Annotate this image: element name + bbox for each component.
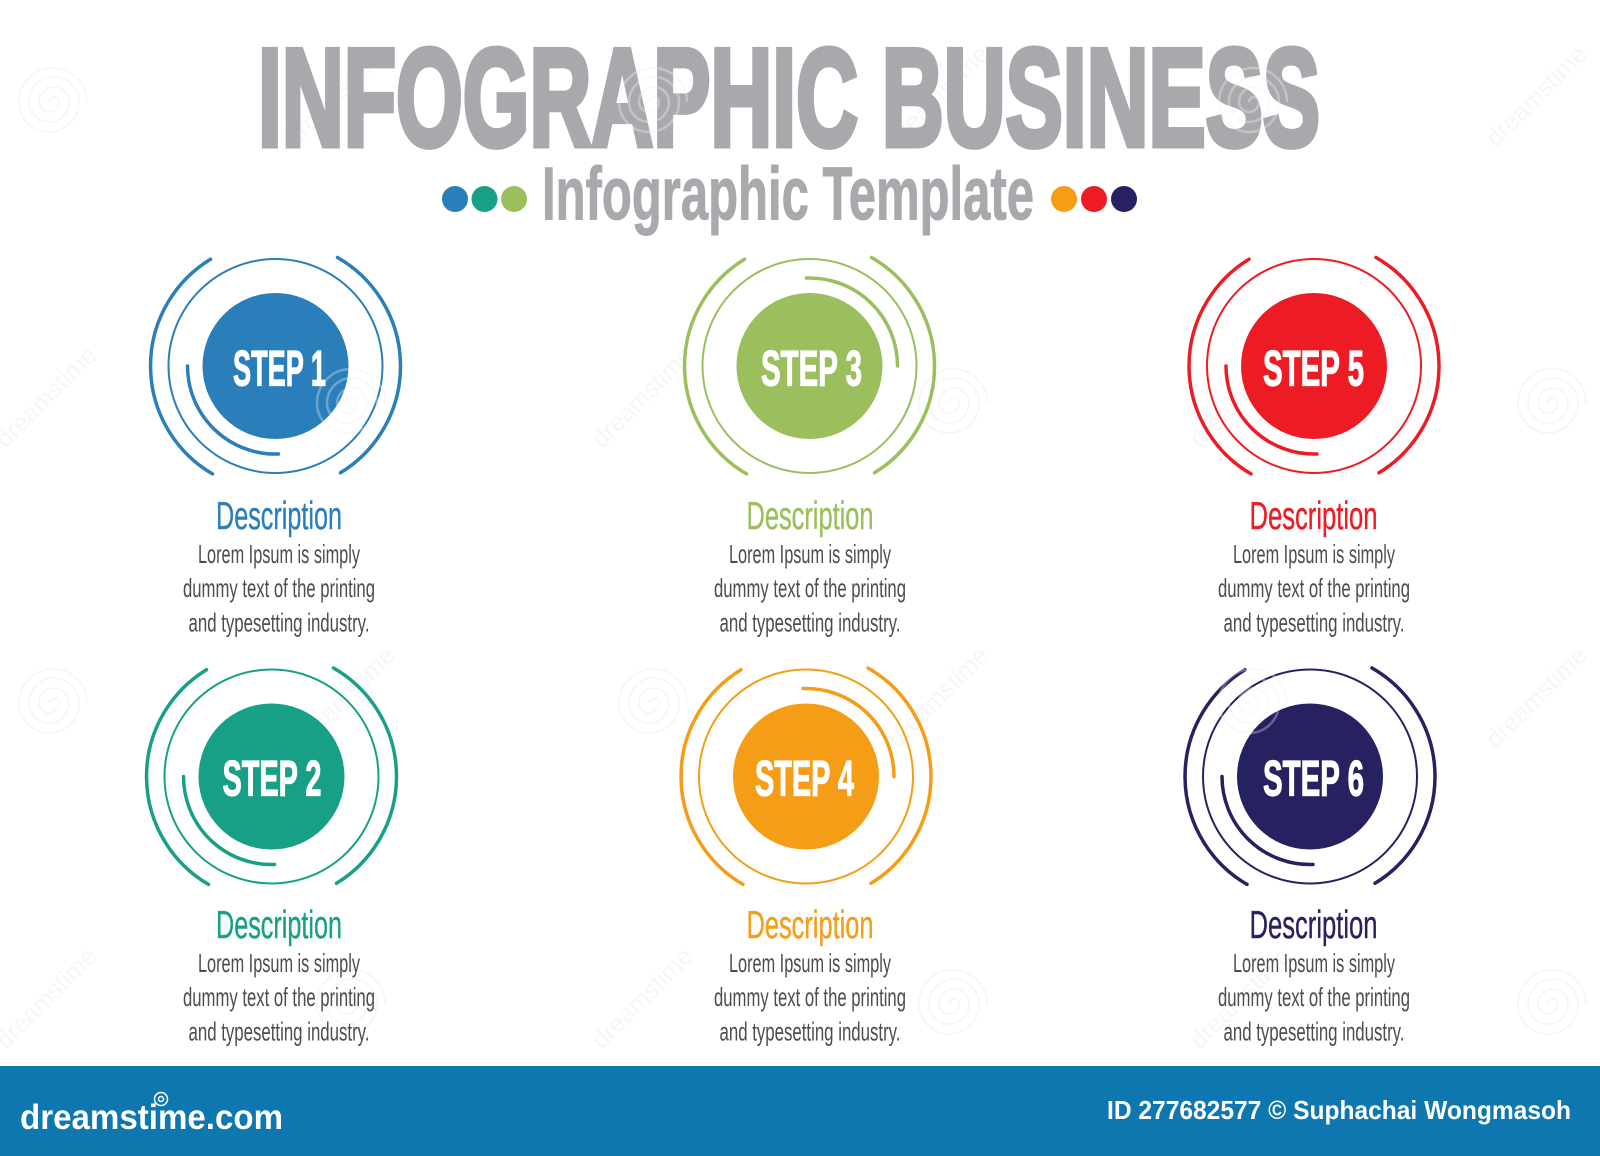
step 2 description: and typesetting industry. (188, 1016, 370, 1046)
step 2 description: Lorem Ipsum is simply (198, 948, 360, 978)
step 1 ring badge (151, 258, 400, 474)
panel: step 5 (1189, 258, 1439, 638)
step 5 description: dummy text of the printing (1218, 573, 1410, 603)
icon: left colour dots (442, 186, 527, 212)
text: dreamstime (1184, 341, 1296, 453)
panel: step 4 (681, 668, 931, 1046)
step 5 description (1218, 539, 1410, 638)
step 6 description: dummy text of the printing (1218, 982, 1410, 1012)
step 2 heading: Description (216, 904, 342, 947)
step 2 label: STEP 2 (222, 750, 322, 806)
step 1 description (183, 539, 375, 638)
step 4 description: and typesetting industry. (720, 1016, 900, 1046)
panel: step 2 (147, 668, 396, 1046)
step 1 description: Lorem Ipsum is simply (198, 539, 360, 569)
step 4 description (714, 948, 906, 1046)
step 2 ring badge (147, 668, 396, 884)
step 6 ring badge (1185, 668, 1435, 884)
step 3 heading: Description (746, 495, 874, 538)
step 1 description: dummy text of the printing (183, 573, 375, 603)
step 5 heading: Description (1250, 495, 1378, 538)
step 5 description: Lorem Ipsum is simply (1233, 539, 1395, 569)
subtitle: Infographic Template (542, 152, 1034, 236)
step 3 description: Lorem Ipsum is simply (729, 539, 891, 569)
subtitle row (442, 152, 1137, 236)
step 3 description: and typesetting industry. (720, 608, 900, 638)
step 6 heading: Description (1250, 904, 1378, 947)
step 6 label: STEP 6 (1263, 750, 1364, 806)
step 3 label: STEP 3 (761, 340, 862, 396)
step 5 ring badge (1189, 258, 1439, 474)
step 1 description: and typesetting industry. (188, 608, 370, 638)
panel: step 1 (151, 258, 400, 638)
text: dreamstime (586, 341, 698, 453)
panel: step 6 (1185, 668, 1435, 1046)
step 3 ring badge (685, 258, 934, 474)
step 1 label: STEP 1 (233, 340, 326, 396)
text: dreamstime (1480, 40, 1592, 152)
step 3 description (714, 539, 906, 638)
step 4 description: Lorem Ipsum is simply (729, 948, 891, 978)
step 3 description: dummy text of the printing (714, 573, 906, 603)
text: dreamstime (586, 942, 698, 1054)
text: dreamstime (882, 40, 994, 152)
text: dreamstime (1184, 942, 1296, 1054)
step 5 label: STEP 5 (1263, 340, 1364, 396)
footer credit: ID 277682577 © Suphachai Wongmasoh (1107, 1095, 1571, 1125)
text: dreamstime (288, 641, 400, 753)
panel: step 3 (685, 258, 934, 638)
footer logo: dreamstime.com (20, 1098, 283, 1137)
text: dreamstime (1480, 641, 1592, 753)
step 6 description: and typesetting industry. (1224, 1016, 1404, 1046)
step 6 description (1218, 948, 1410, 1046)
step 2 description: dummy text of the printing (183, 982, 375, 1012)
step 4 label: STEP 4 (755, 750, 854, 806)
text: dreamstime (882, 641, 994, 753)
step 2 description (183, 948, 375, 1046)
step 1 heading: Description (216, 495, 342, 538)
text: dreamstime (280, 40, 392, 152)
step 5 description: and typesetting industry. (1224, 608, 1404, 638)
icon: logo spiral (154, 1092, 168, 1106)
step 4 description: dummy text of the printing (714, 982, 906, 1012)
step 6 description: Lorem Ipsum is simply (1233, 948, 1395, 978)
icon: right colour dots (1051, 186, 1137, 212)
step 4 ring badge (681, 668, 931, 884)
footer bar (0, 1066, 1600, 1156)
step 4 heading: Description (746, 904, 874, 947)
